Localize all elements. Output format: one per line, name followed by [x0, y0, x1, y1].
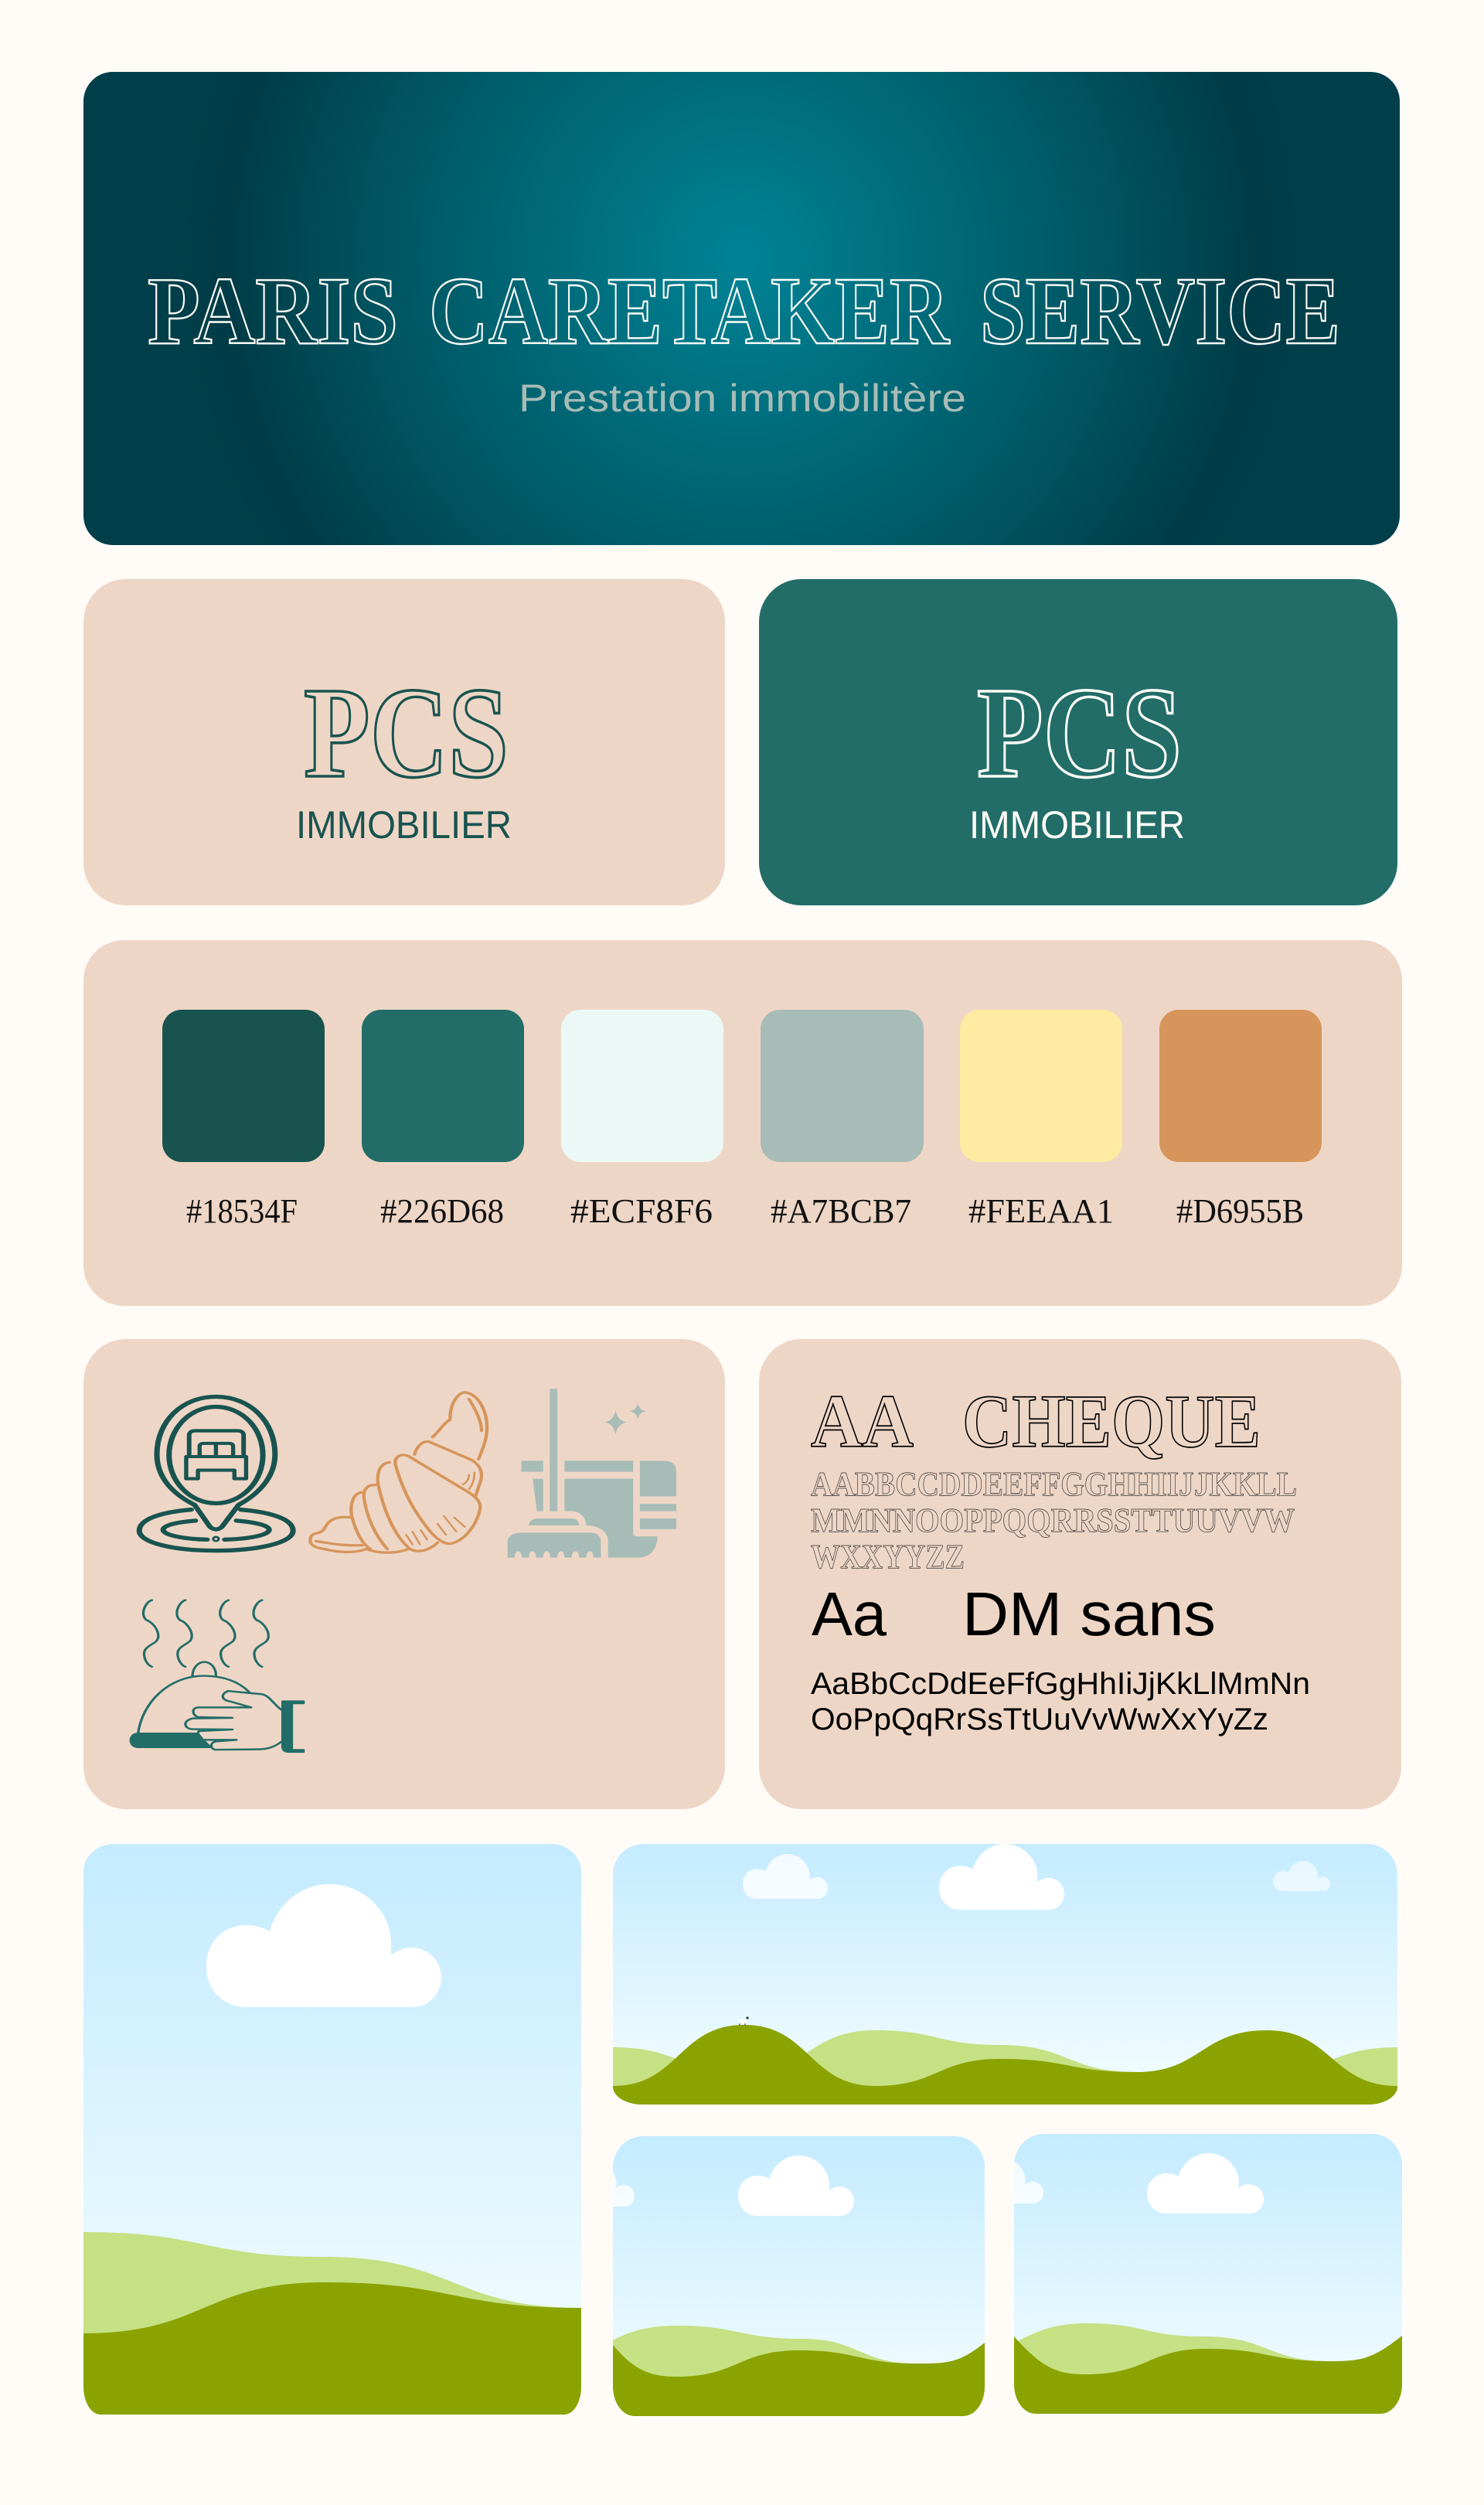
- swatch FEEAA1: [960, 1010, 1122, 1230]
- panel: typography: [759, 1339, 1401, 1809]
- DM sans alphabet: [811, 1667, 1310, 1736]
- swatch 226D68: [362, 1010, 524, 1230]
- swatch A7BCB7: #A7BCB7: [771, 1192, 911, 1230]
- swatch 18534F: #18534F: [186, 1192, 298, 1230]
- title: SERVICE: [980, 258, 1340, 365]
- DM sans alphabet: OoPpQqRrSsTtUuVvWwXxYyZz: [811, 1702, 1268, 1736]
- back hill: [613, 2326, 917, 2389]
- swatch ECF8F6: #ECF8F6: [570, 1192, 713, 1230]
- illustration: small landscape right: [1014, 2134, 1402, 2414]
- Cheque alphabet: AABBCCDDEEFFGGHHIIJJKKLL: [811, 1465, 1297, 1503]
- icon: cloche and serving hand: [131, 1600, 304, 1752]
- front hill: [1014, 2336, 1402, 2414]
- illustration: tall landscape: [83, 1844, 581, 2415]
- illustration: wide landscape: [613, 1844, 1397, 2105]
- title: [148, 258, 1340, 365]
- swatch D6955B: [1159, 1010, 1322, 1230]
- logo subtitle dark: IMMOBILIER: [296, 803, 512, 847]
- font sample: Aa DM sans: [812, 1580, 1216, 1648]
- font sample: Aa DM sans: DM sans: [962, 1580, 1216, 1648]
- cloud: [206, 1884, 441, 2007]
- back hill: [1014, 2323, 1329, 2389]
- title: PARIS: [148, 258, 398, 365]
- Cheque alphabet: WXXYYZZ: [811, 1538, 965, 1576]
- clouds: [613, 2156, 854, 2216]
- swatch FEEAA1: #FEEAA1: [968, 1192, 1114, 1230]
- front hill: [83, 2282, 581, 2415]
- logo subtitle light: IMMOBILIER: [969, 803, 1185, 847]
- swatch D6955B: #D6955B: [1176, 1192, 1304, 1230]
- swatch ECF8F6: [561, 1010, 723, 1230]
- Cheque alphabet: [811, 1465, 1297, 1576]
- subtitle: Prestation immobilitère: [519, 377, 966, 420]
- panel: logo on dark background: [759, 579, 1397, 905]
- header banner: [83, 72, 1400, 545]
- swatch A7BCB7: [761, 1010, 924, 1230]
- tiny sheep: [739, 2016, 749, 2026]
- icon: location pin with bed: [139, 1396, 293, 1551]
- font sample: AA Cheque: AA: [811, 1380, 914, 1464]
- DM sans alphabet: AaBbCcDdEeFfGgHhIiJjKkLlMmNn: [811, 1667, 1310, 1701]
- panel: logo on light background: [83, 579, 725, 905]
- clouds: [743, 1844, 1330, 1910]
- logo wordmark PCS light: PCS: [977, 661, 1182, 805]
- font sample: AA Cheque: CHEQUE: [962, 1380, 1261, 1464]
- swatch 226D68: #226D68: [380, 1192, 504, 1230]
- icon: mop and bucket: [508, 1389, 676, 1558]
- back hill: [613, 2030, 1397, 2105]
- front hill: [613, 2025, 1397, 2105]
- back hill: [83, 2232, 573, 2333]
- font sample: AA Cheque: [811, 1380, 1261, 1464]
- Cheque alphabet: MMNNOOPPQQRRSSTTUUVVW: [811, 1501, 1295, 1539]
- clouds: [1014, 2153, 1264, 2214]
- title: CARETAKER: [429, 258, 950, 365]
- panel: icons: [83, 1339, 725, 1809]
- font sample: Aa DM sans: Aa: [812, 1580, 887, 1648]
- panel: colour palette: [83, 940, 1402, 1306]
- logo wordmark PCS dark: PCS: [304, 661, 509, 805]
- swatch 18534F: [162, 1010, 325, 1230]
- illustration: small landscape left: [613, 2136, 985, 2416]
- front hill: [613, 2343, 985, 2416]
- icon: croissant: [310, 1392, 487, 1552]
